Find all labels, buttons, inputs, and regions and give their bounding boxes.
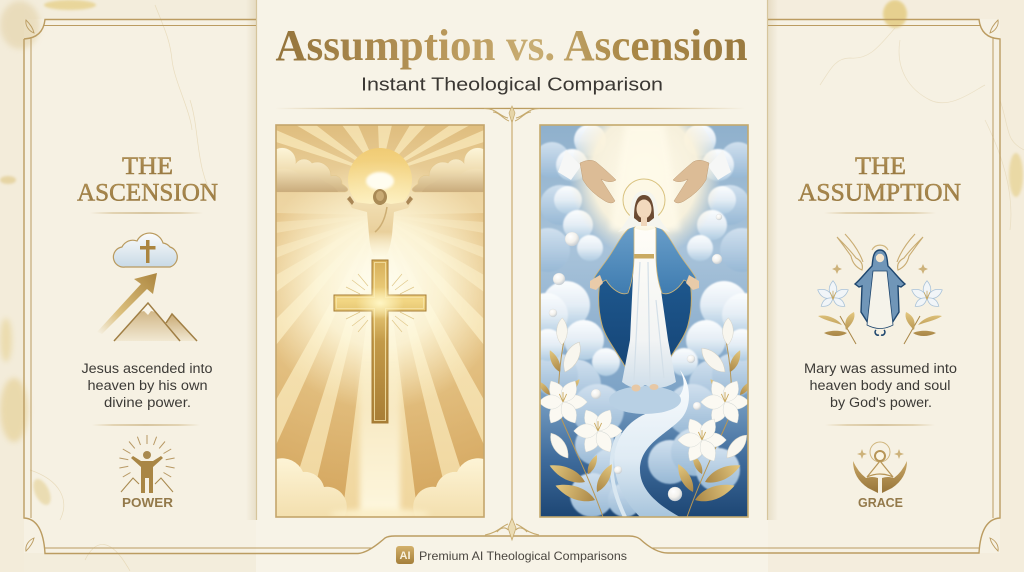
left hand of heaven <box>558 150 616 203</box>
heading: the ascension: ASCENSION <box>77 180 218 206</box>
bottom clouds <box>276 458 484 519</box>
right lilies and leaves <box>678 318 748 516</box>
halo <box>872 245 888 250</box>
heading: the ascension <box>77 153 218 206</box>
footer <box>396 546 627 564</box>
heavenly hands <box>837 234 923 270</box>
description text: by God's power. <box>830 395 932 410</box>
icon: cloud with cross <box>113 233 177 267</box>
cloud under feet <box>609 386 681 414</box>
ascending Jesus figure <box>347 189 413 251</box>
gown <box>622 228 676 388</box>
right column: The Assumption <box>798 153 961 510</box>
halo <box>623 179 665 221</box>
description text <box>804 361 957 410</box>
title: Assumption vs. Ascension <box>276 21 748 70</box>
sparkles <box>832 264 928 274</box>
description text: heaven body and soul <box>810 378 950 393</box>
label: power: POWER <box>122 495 174 510</box>
radiating light wedges <box>276 213 484 517</box>
divider <box>825 424 935 426</box>
neck <box>641 218 647 226</box>
bottom divider ornament <box>485 518 539 540</box>
side panel shadows <box>246 0 778 520</box>
description text: divine power. <box>104 395 191 410</box>
heading: the assumption <box>798 153 961 206</box>
right arm drape <box>653 224 696 294</box>
icon: AI badge: AI <box>400 550 410 562</box>
gold leaves <box>818 312 942 344</box>
right hand of heaven <box>673 150 731 203</box>
top clouds <box>276 148 484 192</box>
icon: Mary with lilies <box>816 234 944 344</box>
Mary figure <box>590 191 699 392</box>
sun white core <box>366 172 394 190</box>
panel: assumption illustration <box>539 124 749 518</box>
central glow <box>276 168 484 400</box>
heading: the assumption: THE <box>855 153 906 180</box>
icon: power figure <box>119 435 175 493</box>
subtitle: Instant Theological Comparison <box>361 74 663 94</box>
center panel <box>256 0 768 572</box>
golden cross <box>334 260 426 423</box>
label: grace: GRACE <box>858 495 903 510</box>
veil <box>618 191 670 232</box>
icon: ascending arrow and mountains <box>97 273 197 341</box>
face <box>636 200 652 218</box>
left lilies and leaves <box>536 318 622 517</box>
heading: the assumption: ASSUMPTION <box>798 180 961 206</box>
belt <box>634 254 654 258</box>
left small lily <box>816 281 850 309</box>
icon: grace hands <box>853 442 907 493</box>
feet <box>632 384 658 392</box>
description text: Jesus ascended into <box>82 361 212 376</box>
front white clouds <box>540 126 748 376</box>
outer mantle <box>599 268 691 372</box>
description text: Mary was assumed into <box>804 361 957 376</box>
hair <box>634 195 654 222</box>
divider <box>824 212 936 214</box>
sun rays behind sky <box>276 126 484 166</box>
description text: heaven by his own <box>88 378 208 393</box>
footer caption: Premium AI Theological Comparisons <box>419 549 627 563</box>
sun disc <box>348 148 412 204</box>
icon: AI badge <box>396 546 414 564</box>
top beam <box>610 125 680 230</box>
panel: ascension illustration <box>275 124 485 518</box>
right small lily <box>910 281 944 309</box>
wave of cloud <box>612 370 689 517</box>
back clouds <box>540 142 748 516</box>
light column <box>357 373 403 512</box>
divider <box>90 212 203 214</box>
small figure <box>855 250 905 323</box>
gown folds <box>634 262 664 372</box>
left arm drape <box>594 224 637 294</box>
description text <box>82 361 212 410</box>
divider <box>92 424 200 426</box>
pearls <box>549 214 722 501</box>
starburst behind cross <box>342 274 418 332</box>
celestial cream glow <box>572 126 718 248</box>
heading: the ascension: THE <box>122 153 173 180</box>
center vertical divider <box>511 120 513 522</box>
left column: The Ascension <box>77 153 218 510</box>
left hand <box>590 275 603 290</box>
right hand <box>686 275 699 290</box>
top divider ornament <box>275 106 745 123</box>
